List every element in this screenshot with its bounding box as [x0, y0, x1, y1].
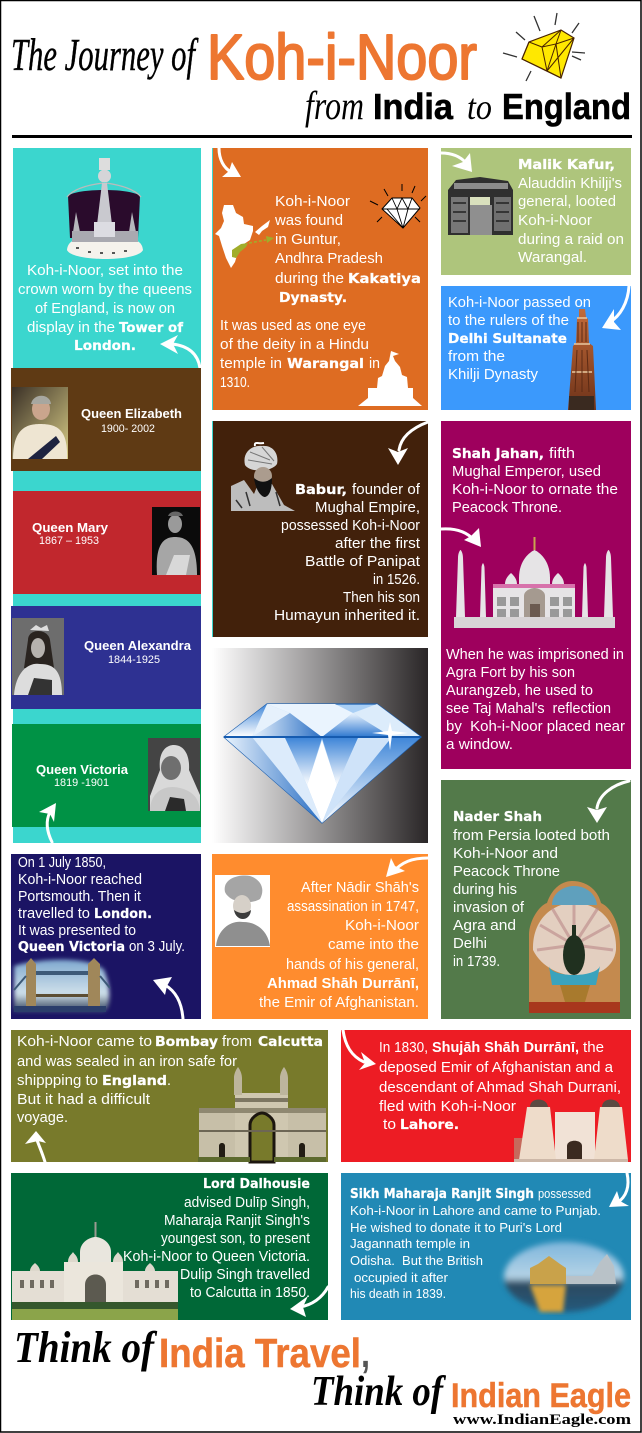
text: Ranjit Singh: Sikh Maharaja Ranjit Singh	[350, 1186, 534, 1202]
title: India	[373, 86, 454, 127]
panel: Ahmad Shah Durrani	[212, 854, 428, 1019]
text: Malik Kafur: general, looted	[518, 194, 616, 210]
text: Bombay from Calcutta: Bombay	[155, 1034, 218, 1050]
text: imprisoned in Agra Fort: When he was imprisoned in	[446, 647, 624, 663]
text: Delhi Sultanate	[448, 295, 591, 383]
text: Babur: founder of	[352, 482, 421, 498]
text: crown caption: Koh-i-Noor, set into the	[27, 263, 183, 279]
image: Taj Mahal	[454, 537, 615, 628]
arrow: to Delhi Sultanate	[602, 286, 629, 330]
text: Ahmad Shah Durrani: came into the	[328, 937, 419, 953]
text: Ranjit Singh: Koh-i-Noor in Lahore and came to Punjab.	[350, 1203, 601, 1218]
text: Bombay from Calcutta: England	[102, 1073, 167, 1089]
arrow: to Nader Shah	[587, 781, 629, 823]
panel: found in Guntur	[212, 148, 428, 410]
text: where it was found: was found	[274, 213, 343, 229]
panel: large blue diamond	[212, 648, 428, 843]
icon: crown	[67, 158, 143, 259]
arrow: to Lahore	[343, 1030, 376, 1070]
text: Lord Dalhousie: to Calcutta in 1850.	[190, 1285, 310, 1301]
panel: Delhi Sultanate	[441, 286, 631, 410]
card: Queen Alexandra	[11, 606, 201, 709]
footer slogan: Think of	[14, 1323, 158, 1372]
card: Queen Mary: 1867 – 1953	[39, 535, 99, 547]
footer slogan: Think of	[311, 1369, 447, 1415]
text: Ahmad Shah Durrani: After Nādir Shāh's	[301, 880, 419, 896]
text: Lord Dalhousie: Koh-i-Noor to Queen Victoria.	[123, 1249, 310, 1265]
card: Queen Victoria: 1819 -1901	[54, 777, 109, 789]
text: reached Portsmouth: travelled to	[18, 906, 90, 922]
text: Bombay from Calcutta: Koh-i-Noor came to	[17, 1034, 152, 1050]
text: Babur: Battle of Panipat	[305, 554, 420, 570]
text: crown caption: display in the	[27, 320, 115, 336]
title	[11, 21, 631, 128]
text: reached Portsmouth	[18, 855, 185, 955]
arrow: to London	[153, 977, 183, 1019]
text: imprisoned in Agra Fort: Aurangzeb, he used to	[446, 683, 593, 699]
text: Malik Kafur: Koh-i-Noor	[518, 213, 592, 229]
text: Shah Jahan: fifth	[549, 446, 575, 462]
text: imprisoned in Agra Fort: by Koh-i-Noor placed near	[446, 719, 625, 735]
text: Delhi Sultanate: Koh-i-Noor passed on	[448, 295, 591, 311]
icon: temple silhouette	[358, 351, 422, 406]
text: Delhi Sultanate: Delhi Sultanate	[448, 331, 567, 347]
text: where it was found	[220, 194, 421, 391]
text: Shujah Shah Durrani: descendant of Ahmad Shah Durrani,	[379, 1080, 621, 1096]
text: Delhi Sultanate: to the rulers of the	[448, 313, 569, 329]
text: Ahmad Shah Durrani: assassination in 1747,	[287, 899, 419, 915]
text: Lord Dalhousie: youngest son, to present	[161, 1231, 310, 1247]
icon: India map	[215, 205, 274, 268]
text: Babur: possessed Koh-i-Noor	[281, 518, 420, 534]
text: where it was found: in	[369, 356, 380, 372]
text: Malik Kafur: Alauddin Khilji's	[518, 176, 622, 192]
header rule	[12, 135, 632, 138]
panel: Ranjit Singh	[341, 1173, 631, 1320]
text: imprisoned in Agra Fort: Agra Fort by his son	[446, 665, 575, 681]
image: Lahore Fort	[514, 1100, 628, 1162]
text: Shah Jahan: Mughal Emperor, used	[452, 464, 601, 480]
card: Queen Elizabeth	[11, 368, 201, 471]
title: to	[467, 87, 492, 127]
text: Ahmad Shah Durrani: the Emir of Afghanistan.	[259, 995, 419, 1011]
text: Shujah Shah Durrani: Lahore.	[400, 1117, 459, 1133]
image: Gateway of India	[198, 1067, 326, 1162]
text: where it was found: temple in	[220, 356, 282, 372]
panel: Shah Jahan	[441, 421, 631, 769]
text: Ranjit Singh: possessed	[538, 1186, 591, 1201]
arrow: to Bombay	[25, 1131, 46, 1162]
text: where it was found: It was used as one eye	[220, 318, 366, 334]
text: Shah Jahan: Peacock Throne.	[452, 500, 562, 516]
text: Ranjit Singh: occupied it after	[354, 1270, 449, 1285]
text: Babur: Then his son	[343, 590, 420, 606]
text: reached Portsmouth: It was presented to	[18, 923, 136, 939]
text: reached Portsmouth: on 3 July.	[129, 939, 185, 955]
text: Bombay from Calcutta: shippping to	[17, 1073, 98, 1089]
card: Queen Elizabeth: Queen Elizabeth	[81, 406, 182, 421]
arrow: to Babur	[388, 422, 428, 465]
text: crown caption	[18, 263, 192, 354]
text: where it was found: 1310.	[220, 375, 250, 391]
text: Lord Dalhousie: Dulip Singh travelled	[180, 1267, 310, 1283]
card: Queen Mary: Queen Mary	[32, 520, 109, 535]
footer slogan	[14, 1323, 632, 1428]
text: where it was found: in Guntur,	[275, 232, 341, 248]
arrow: to Tower of London	[160, 335, 200, 368]
image: Ahmad Shah portrait	[215, 875, 270, 947]
text: Malik Kafur: during a raid on	[518, 232, 624, 248]
text: Shujah Shah Durrani: fled with Koh-i-Noor	[379, 1099, 516, 1115]
text: Bombay from Calcutta: But it had a difficult	[17, 1092, 150, 1108]
arrow: to Lord Dalhousie	[290, 1287, 328, 1317]
text: Nader Shah	[453, 809, 610, 970]
text: Nader Shah: invasion of	[453, 900, 525, 916]
text: imprisoned in Agra Fort	[446, 647, 625, 753]
text: Babur: Babur,	[295, 482, 347, 498]
text: Ranjit Singh: Jagannath temple in	[350, 1236, 470, 1251]
text: imprisoned in Agra Fort: see Taj Mahal's reflection	[446, 701, 611, 717]
text: crown caption: of England, is now on	[35, 301, 175, 317]
footer slogan: ,	[361, 1330, 370, 1376]
panel: Lahore	[341, 1030, 631, 1162]
card: Queen Victoria: Queen Victoria	[36, 762, 129, 777]
text: Ahmad Shah Durrani: Ahmad Shāh Durrānī,	[267, 975, 419, 992]
arrow: to Ranjit Singh	[609, 1173, 629, 1207]
text: where it was found: Kakatiya	[348, 271, 421, 287]
card: Queen Victoria	[12, 724, 201, 827]
text: Babur: after the first	[335, 536, 420, 552]
text: Ranjit Singh: He wished to donate it to Puri's Lord	[350, 1220, 562, 1235]
text: Delhi Sultanate: Khilji Dynasty	[448, 367, 539, 383]
text: crown caption: London.	[74, 338, 136, 354]
card: Queen Elizabeth: 1900- 2002	[101, 423, 155, 435]
card: Queen Alexandra: 1844-1925	[108, 654, 160, 666]
text: reached Portsmouth: On 1 July 1850,	[18, 855, 106, 871]
text: Lord Dalhousie: Lord Dalhousie	[203, 1176, 310, 1192]
text: Bombay from Calcutta: .	[167, 1073, 171, 1089]
image: Golden Temple	[504, 1242, 624, 1312]
text: where it was found: of the deity in a Hindu	[220, 337, 369, 353]
text: where it was found: Warangal	[287, 356, 364, 372]
text: Ranjit Singh	[350, 1186, 601, 1301]
text: Babur	[274, 482, 421, 624]
text: crown caption: Tower of	[119, 320, 183, 336]
text: Shujah Shah Durrani: In 1830,	[379, 1040, 428, 1056]
text: Ahmad Shah Durrani: hands of his general,	[286, 957, 419, 973]
text: where it was found: Andhra Pradesh	[275, 251, 383, 267]
image: Babur portrait	[231, 443, 295, 511]
text: Delhi Sultanate: from the	[448, 349, 505, 365]
text: Ahmad Shah Durrani	[259, 880, 419, 1011]
text: Shujah Shah Durrani: the	[583, 1040, 604, 1056]
image: Qutub Minar	[568, 309, 596, 410]
text: Malik Kafur: Warangal.	[518, 250, 587, 266]
text: Shujah Shah Durrani: to	[383, 1117, 396, 1133]
image: Tower Bridge	[14, 958, 110, 1012]
image: peacock throne	[529, 881, 620, 1013]
text: where it was found: Koh-i-Noor	[275, 194, 350, 210]
icon: yellow diamond	[503, 13, 585, 81]
text: Ranjit Singh: Odisha. But the British	[350, 1253, 483, 1268]
text: Nader Shah: Koh-i-Noor and	[453, 846, 558, 862]
text: crown caption: crown worn by the queens	[18, 282, 192, 298]
arrow: to Ahmad Shah	[386, 858, 428, 877]
panel: Babur	[212, 421, 428, 637]
footer slogan: India Travel	[159, 1330, 361, 1376]
title: England	[502, 86, 631, 127]
panel: Malik Kafur	[441, 148, 631, 275]
arrow: start	[219, 148, 241, 177]
panel: Bombay	[11, 1030, 328, 1162]
text: Nader Shah: Peacock Throne	[453, 864, 560, 880]
panel: queens and crown	[11, 148, 201, 843]
text: where it was found: during the	[275, 271, 344, 287]
text: Lord Dalhousie: Maharaja Ranjit Singh's	[164, 1213, 310, 1229]
arrow: to Queen Victoria	[39, 803, 56, 842]
text: Shujah Shah Durrani: Shujāh Shāh Durrānī,	[432, 1039, 579, 1056]
image: Victoria Memorial	[12, 1222, 178, 1320]
arrow: to Malik Kafur	[441, 153, 472, 172]
text: imprisoned in Agra Fort: a window.	[446, 737, 513, 753]
card: Queen Alexandra: Queen Alexandra	[84, 638, 192, 653]
text: Malik Kafur: Malik Kafur,	[518, 157, 615, 173]
text: Shujah Shah Durrani: deposed Emir of Afghanistan and a	[379, 1060, 614, 1076]
panel: Nader Shah	[441, 780, 631, 1019]
text: Shah Jahan: Koh-i-Noor to ornate the	[452, 482, 618, 498]
text: reached Portsmouth: London.	[94, 906, 152, 922]
image: ruined gateway	[448, 177, 513, 235]
text: Bombay from Calcutta: from	[222, 1034, 252, 1050]
text: Shah Jahan	[452, 446, 618, 516]
text: Lord Dalhousie	[123, 1176, 310, 1301]
panel: Lord Dalhousie	[11, 1173, 328, 1320]
text: where it was found: Dynasty.	[279, 290, 347, 306]
text: Babur: Humayun inherited it.	[274, 608, 420, 624]
arrow: to Taj Mahal	[441, 528, 481, 547]
text: Bombay from Calcutta	[17, 1034, 323, 1126]
text: Nader Shah: Nader Shah	[453, 809, 542, 825]
text: Nader Shah: Delhi	[453, 936, 487, 952]
text: Malik Kafur	[518, 157, 624, 266]
icon: white diamond	[370, 184, 426, 228]
text: reached Portsmouth: Portsmouth. Then it	[18, 889, 141, 905]
text: Bombay from Calcutta: and was sealed in an iron safe for	[17, 1054, 237, 1070]
text: Nader Shah: in 1739.	[453, 954, 500, 970]
text: Shujah Shah Durrani	[379, 1039, 621, 1133]
text: Nader Shah: from Persia looted both	[453, 828, 610, 844]
title: from	[305, 83, 364, 128]
text: Shah Jahan: Shah Jahan,	[452, 446, 544, 462]
text: Nader Shah: during his	[453, 882, 517, 898]
text: reached Portsmouth: Koh-i-Noor reached	[18, 872, 142, 888]
title: The Journey of	[11, 29, 199, 80]
footer slogan: www.IndianEagle.com	[453, 1412, 632, 1428]
text: Nader Shah: Agra and	[453, 918, 516, 934]
title: Koh-i-Noor	[207, 21, 477, 93]
text: Babur: in 1526.	[373, 572, 420, 588]
text: reached Portsmouth: Queen Victoria	[18, 939, 125, 955]
card: Queen Mary	[13, 491, 201, 594]
panel: London	[11, 854, 201, 1019]
text: Ahmad Shah Durrani: Koh-i-Noor	[345, 918, 419, 934]
text: Bombay from Calcutta: voyage.	[17, 1110, 68, 1126]
text: Lord Dalhousie: advised Dulīp Singh,	[184, 1195, 310, 1211]
text: Ranjit Singh: his death in 1839.	[350, 1286, 446, 1301]
text: Bombay from Calcutta: Calcutta	[258, 1034, 323, 1050]
text: Babur: Mughal Empire,	[315, 500, 420, 516]
